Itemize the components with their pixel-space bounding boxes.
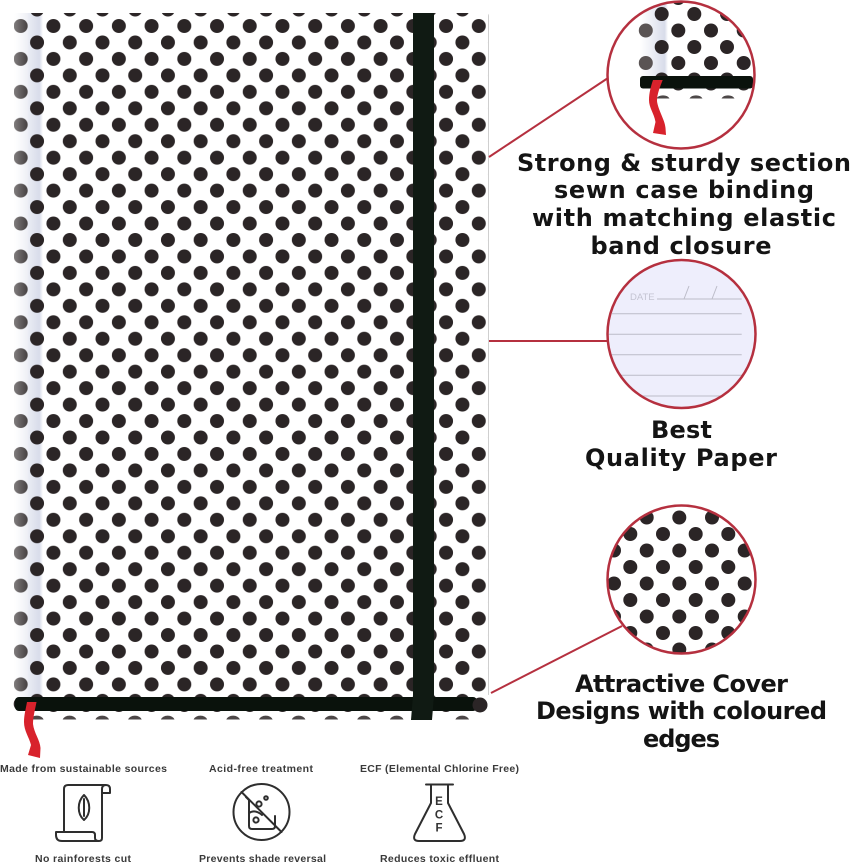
callout circle: paper detail	[608, 260, 756, 408]
ribbon bookmark	[24, 702, 40, 758]
heading: cover: Designs with coloured	[536, 697, 827, 725]
band end dot	[472, 698, 488, 712]
horizontal elastic band	[15, 697, 477, 711]
icon: ECF flask: F	[435, 822, 443, 834]
heading: paper: Best	[651, 416, 712, 444]
icon: ECF flask: C	[435, 810, 443, 822]
heading: binding: Strong & sturdy section	[517, 149, 850, 177]
heading: binding	[517, 149, 850, 260]
heading: binding: sewn case binding	[554, 176, 814, 204]
heading: binding: with matching elastic	[532, 204, 836, 232]
page block below band	[14, 697, 469, 720]
notebook cover with polka dots	[14, 13, 489, 697]
icon: ECF flask: E	[435, 796, 443, 808]
heading: cover: Attractive Cover	[575, 670, 788, 698]
callout circle: paper detail: DATE	[630, 292, 655, 303]
icon: prohibited beaker	[234, 784, 290, 840]
label: ECF: ECF (Elemental Chlorine Free)	[360, 763, 519, 775]
notebook	[14, 13, 489, 758]
connector: cover	[491, 626, 622, 693]
callout circle: cover detail	[607, 506, 756, 656]
vertical elastic band	[411, 13, 434, 720]
heading: binding: band closure	[590, 232, 772, 260]
connector: paper	[489, 340, 608, 342]
connector: binding	[489, 78, 608, 157]
heading: paper	[585, 416, 777, 472]
label: sustainable sources: Made from sustainable sources	[0, 763, 167, 775]
label: acid-free treatment: Acid-free treatment	[209, 763, 314, 775]
callout circle: binding detail	[608, 0, 754, 148]
heading: cover	[536, 670, 827, 753]
icon: leaf scroll	[56, 785, 110, 841]
heading: paper: Quality Paper	[585, 444, 777, 472]
icon: ECF flask	[414, 784, 465, 841]
heading: cover: edges	[643, 725, 720, 753]
